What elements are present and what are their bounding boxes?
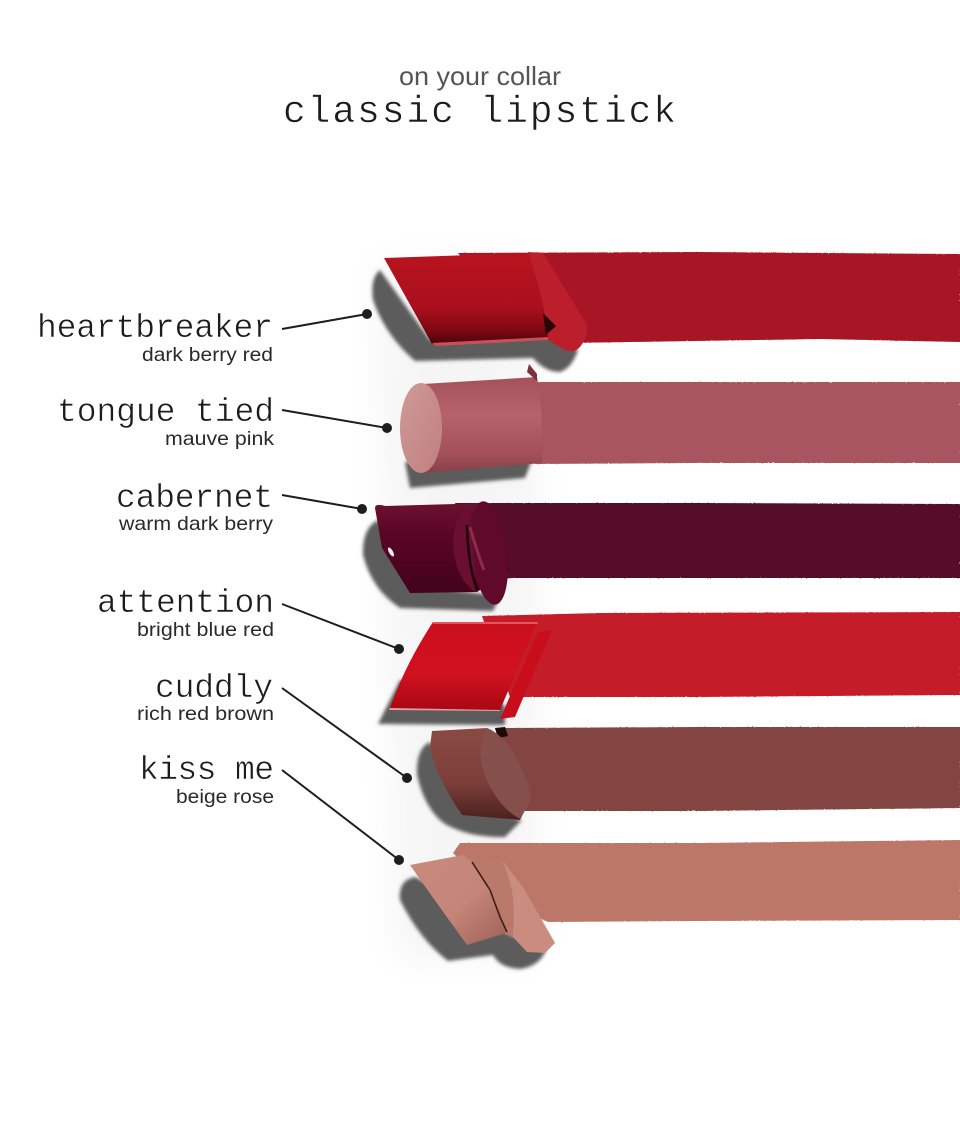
lipstick: attention: [389, 622, 552, 719]
label: tongue tied: tongue tied: [57, 394, 274, 431]
swatch: attention: [482, 612, 960, 697]
lipstick: heartbreaker: [384, 252, 587, 351]
label: kiss me: beige rose: [176, 786, 274, 808]
label: kiss me: [139, 752, 404, 865]
subtitle: on your collar: [399, 61, 561, 91]
shadow: heartbreaker: [372, 270, 578, 372]
swatch: tongue tied: [535, 382, 960, 464]
title: classic lipstick: [283, 91, 676, 134]
label: tongue tied: [57, 394, 392, 450]
label: cabernet: cabernet: [116, 480, 273, 517]
label: heartbreaker: heartbreaker: [37, 310, 273, 347]
shadow: cabernet: [363, 520, 500, 611]
label: attention: bright blue red: [137, 619, 274, 641]
label: cabernet: warm dark berry: [118, 513, 273, 535]
swatch: kiss me: [453, 840, 960, 922]
label: cuddly: [137, 670, 412, 783]
lipstick: cabernet: [375, 499, 513, 607]
label: kiss me: kiss me: [139, 752, 274, 789]
background halo: [375, 260, 540, 960]
swatches: [453, 252, 960, 922]
label: cabernet: [116, 480, 367, 535]
title block: [283, 61, 676, 134]
lipstick: tongue tied: [400, 364, 542, 473]
label: heartbreaker: dark berry red: [142, 344, 273, 366]
label: attention: [97, 585, 404, 654]
swatch: cuddly: [495, 727, 960, 811]
shadow: tongue tied: [405, 460, 532, 488]
label: attention: attention: [97, 585, 274, 622]
swatch: cabernet: [455, 503, 960, 578]
shadows: [363, 270, 578, 969]
shadow: attention: [378, 680, 505, 725]
swatch: heartbreaker: [458, 252, 960, 343]
lipstick: kiss me: [410, 855, 555, 953]
shadow: cuddly: [417, 742, 522, 837]
label: cuddly: rich red brown: [137, 703, 274, 725]
lipstick: cuddly: [430, 727, 531, 820]
shadow: kiss me: [400, 877, 546, 969]
label: heartbreaker: [37, 309, 372, 366]
label: tongue tied: mauve pink: [165, 428, 274, 450]
label: cuddly: cuddly: [155, 670, 273, 707]
